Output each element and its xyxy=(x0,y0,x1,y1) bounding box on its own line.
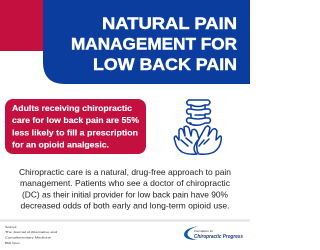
icon: spine above open hands xyxy=(174,100,221,154)
callout text: less likely to fill a prescription xyxy=(12,128,138,138)
title: LOW BACK PAIN xyxy=(93,55,237,74)
logo arc xyxy=(184,226,199,240)
panel: opioid statistic callout xyxy=(5,99,146,154)
icon: right hand xyxy=(197,126,221,154)
title: MANAGEMENT FOR xyxy=(71,34,237,54)
icon: spine xyxy=(186,100,210,125)
title: NATURAL PAIN xyxy=(102,14,237,33)
body paragraph: (DC) as their initial provider for low back pain have 90% xyxy=(22,190,228,199)
body paragraph: Chiropractic care is a natural, drug-free approach to pain xyxy=(19,168,231,177)
title xyxy=(71,14,237,74)
body paragraph xyxy=(19,168,231,211)
body paragraph: decreased odds of both early and long-term opioid use. xyxy=(20,202,229,211)
callout text: care for low back pain are 55% xyxy=(12,116,139,125)
sources xyxy=(5,225,57,245)
callout text: for an opioid analgesic. xyxy=(12,140,109,150)
body paragraph: management. Patients who see a doctor of chiropractic xyxy=(20,179,230,188)
sources: BMJ Open xyxy=(5,241,20,245)
logo: Foundation for Chiropractic Progress: Chiropractic Progress xyxy=(194,234,243,240)
logo: Foundation for Chiropractic Progress xyxy=(184,226,243,240)
sources: The Journal of Alternative and xyxy=(5,230,57,234)
sources: Sources: xyxy=(5,225,17,229)
blue header panel xyxy=(43,0,250,84)
icon: left hand xyxy=(174,126,199,154)
sources: Complementary Medicine xyxy=(5,236,51,240)
logo wordmark: Foundation for xyxy=(194,229,214,233)
callout text xyxy=(12,104,139,150)
red header block xyxy=(0,0,60,51)
callout text: Adults receiving chiropractic xyxy=(12,104,133,113)
